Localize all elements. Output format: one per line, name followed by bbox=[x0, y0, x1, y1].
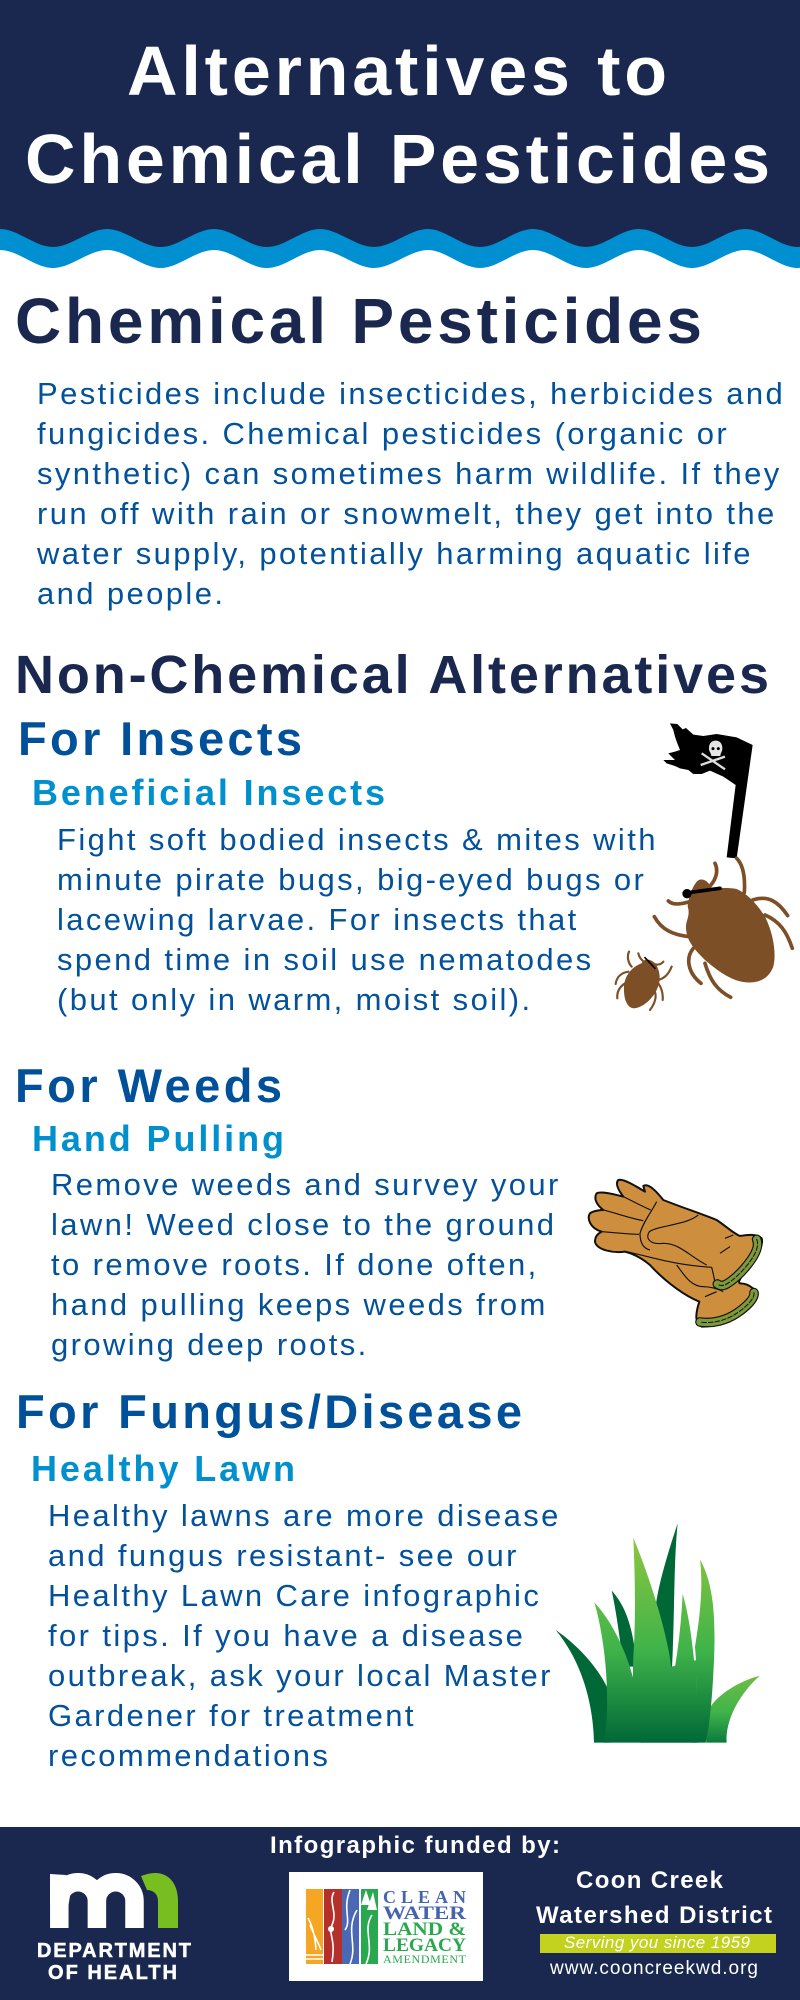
text: healthy lawn body: Healthy Lawn Care infographic bbox=[48, 1578, 541, 1613]
title: Chemical Pesticides bbox=[25, 120, 770, 198]
subheading: healthy lawn: Healthy Lawn bbox=[31, 1448, 295, 1489]
icon: pirate bugs with flag bbox=[616, 723, 792, 1010]
text: healthy lawn body bbox=[48, 1498, 561, 1773]
text: beneficial insects body: Fight soft bodied insects & mites with bbox=[57, 822, 658, 857]
logo: coon creek watershed district: Watershed District bbox=[536, 1902, 772, 1929]
icon: grass bbox=[556, 1523, 760, 1743]
footer bbox=[0, 1827, 800, 2000]
wave divider bbox=[0, 229, 800, 268]
text: funding note: Infographic funded by: bbox=[270, 1832, 560, 1859]
text: pesticides description: run off with rain or snowmelt, they get into the bbox=[37, 496, 777, 531]
logo: clean water land and legacy amendment: LAND & bbox=[383, 1919, 466, 1940]
text: beneficial insects body: spend time in soil use nematodes bbox=[57, 942, 594, 977]
heading: for insects: For Insects bbox=[18, 712, 302, 765]
text: pesticides description: water supply, potentially harming aquatic life bbox=[36, 536, 753, 571]
logo: minnesota department of health: OF HEALTH bbox=[48, 1962, 177, 1984]
heading: non-chemical alternatives: Non-Chemical Alternatives bbox=[15, 645, 769, 705]
heading: chemical pesticides: Chemical Pesticides bbox=[15, 285, 702, 357]
section: for weeds bbox=[15, 1059, 561, 1362]
text: pesticides description: Pesticides include insecticides, herbicides and bbox=[37, 376, 785, 411]
logo: coon creek watershed district: www.cooncreekwd.org bbox=[549, 1958, 758, 1979]
text: beneficial insects body: lacewing larvae. For insects that bbox=[57, 902, 579, 937]
logo: clean water land and legacy amendment bbox=[289, 1872, 483, 1981]
header banner bbox=[0, 0, 800, 250]
section: for fungus and disease bbox=[16, 1385, 561, 1773]
icon: large bug bbox=[654, 858, 792, 997]
logo: clean water land and legacy amendment: CLEAN bbox=[383, 1887, 466, 1907]
text: healthy lawn body: for tips. If you have a disease bbox=[48, 1618, 525, 1653]
logo: clean water land and legacy amendment: AMENDMENT bbox=[383, 1952, 467, 1966]
text: healthy lawn body: Gardener for treatment bbox=[48, 1698, 416, 1733]
text: pesticides description: synthetic) can sometimes harm wildlife. If they bbox=[37, 456, 782, 491]
icon: pirate flag bbox=[663, 723, 753, 858]
text: healthy lawn body: Healthy lawns are more disease bbox=[48, 1498, 561, 1533]
text: pesticides description: and people. bbox=[37, 576, 225, 611]
icon: small bug bbox=[616, 952, 672, 1010]
icon: gardening gloves bbox=[589, 1180, 762, 1327]
text: hand pulling body: growing deep roots. bbox=[51, 1327, 369, 1362]
text: hand pulling body: lawn! Weed close to the ground bbox=[51, 1207, 556, 1242]
text: hand pulling body: Remove weeds and survey your bbox=[51, 1167, 561, 1202]
text: beneficial insects body: minute pirate bugs, big-eyed bugs or bbox=[57, 862, 646, 897]
title: Alternatives to bbox=[127, 32, 667, 110]
text: hand pulling body bbox=[51, 1167, 561, 1362]
text: healthy lawn body: outbreak, ask your local Master bbox=[48, 1658, 553, 1693]
text: hand pulling body: to remove roots. If done often, bbox=[51, 1247, 539, 1282]
glove cuff trims bbox=[700, 1239, 758, 1322]
text: hand pulling body: hand pulling keeps weeds from bbox=[51, 1287, 548, 1322]
text: healthy lawn body: and fungus resistant- see our bbox=[48, 1538, 519, 1573]
section: for insects bbox=[18, 712, 658, 1017]
logo: coon creek watershed district: Coon Creek bbox=[576, 1867, 724, 1894]
logo: minnesota department of health bbox=[37, 1873, 191, 1984]
logo: clean water land and legacy amendment: WATER bbox=[383, 1903, 466, 1924]
text: beneficial insects body: (but only in warm, moist soil). bbox=[57, 982, 532, 1017]
text: beneficial insects body bbox=[57, 822, 658, 1017]
text: pesticides description: fungicides. Chemical pesticides (organic or bbox=[37, 416, 729, 451]
logo: coon creek watershed district: Serving you since 1959 bbox=[564, 1933, 751, 1952]
text: healthy lawn body: recommendations bbox=[48, 1738, 330, 1773]
title bbox=[25, 32, 770, 198]
subheading: beneficial insects: Beneficial Insects bbox=[32, 772, 385, 813]
logo: minnesota department of health: DEPARTMENT bbox=[37, 1940, 191, 1962]
logo: clean water land and legacy amendment: LEGACY bbox=[383, 1935, 466, 1956]
heading: for fungus/disease: For Fungus/Disease bbox=[16, 1385, 522, 1438]
subheading: hand pulling: Hand Pulling bbox=[32, 1118, 284, 1159]
heading: for weeds: For Weeds bbox=[15, 1059, 282, 1112]
logo: coon creek watershed district bbox=[536, 1867, 776, 1979]
text: pesticides description bbox=[36, 376, 785, 611]
